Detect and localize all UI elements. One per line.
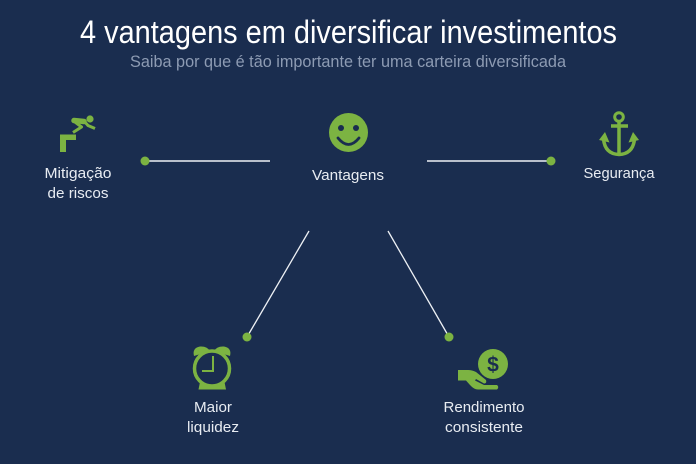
label: Mitigação de riscos xyxy=(44,165,112,202)
connector: right xyxy=(427,156,556,166)
label: Maior liquidez: Maior xyxy=(194,399,232,416)
label: Rendimento consistente: consistente xyxy=(445,419,523,436)
label: Maior liquidez xyxy=(187,399,239,436)
icon: hand holding a coin: $ xyxy=(487,354,499,376)
icon: smiley xyxy=(329,113,368,152)
connector: bottom left xyxy=(242,231,309,342)
title: 4 vantagens em diversificar investimentos xyxy=(80,14,617,50)
icon: runner jumping over a step xyxy=(60,115,95,152)
label: Rendimento consistente: Rendimento xyxy=(444,399,524,416)
label: Vantagens: Vantagens xyxy=(312,167,384,184)
label: Rendimento consistente xyxy=(444,399,524,436)
icon: alarm clock xyxy=(194,346,230,390)
label: Segurança: Segurança xyxy=(584,165,655,182)
label: Mitigação de riscos: Mitigação xyxy=(44,165,112,182)
subtitle: Saiba por que é tão importante ter uma carteira diversificada xyxy=(130,53,567,71)
icon: hand holding a coin xyxy=(458,349,508,390)
connector: left xyxy=(140,156,270,166)
connector: bottom right xyxy=(388,231,454,342)
label: Mitigação de riscos: de riscos xyxy=(48,185,108,202)
label: Maior liquidez: liquidez xyxy=(187,419,239,436)
icon: anchor xyxy=(599,113,639,154)
